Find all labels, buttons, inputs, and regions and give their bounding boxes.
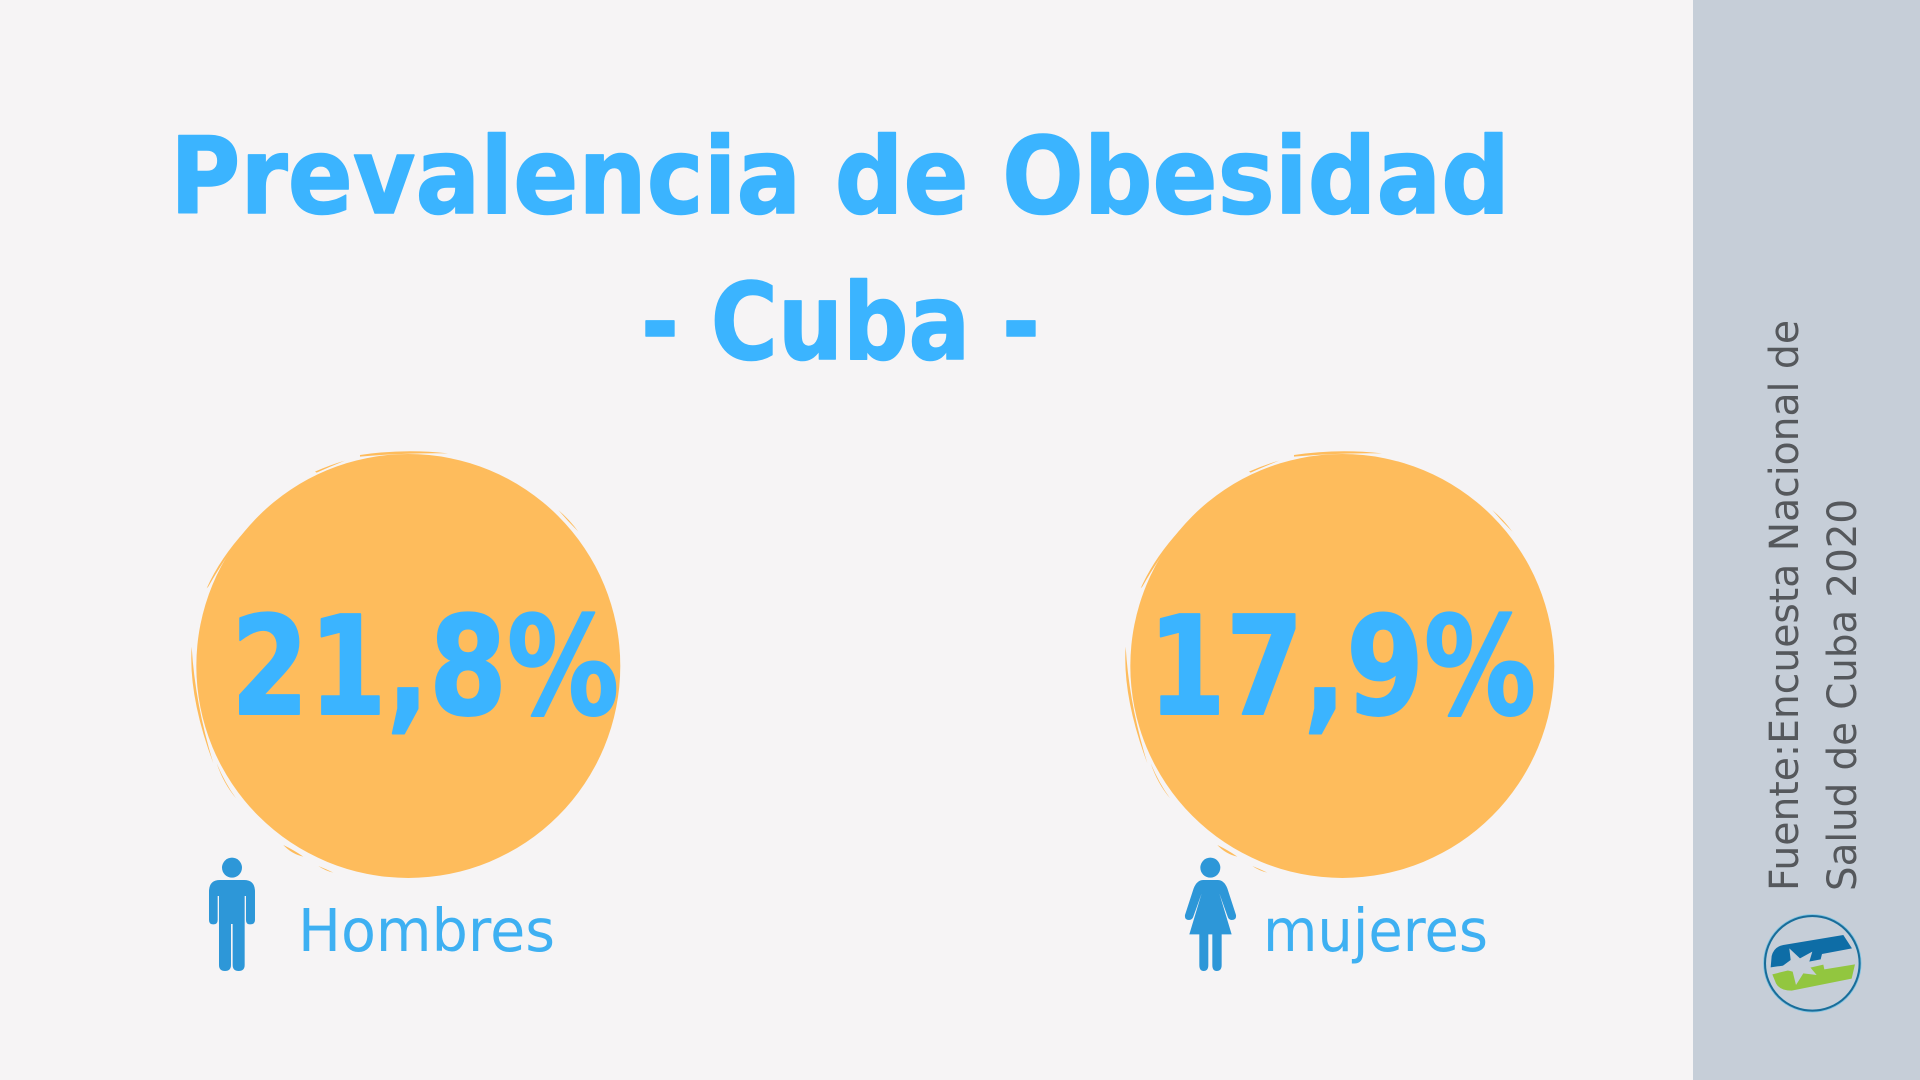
value: mujeres: 17,9% <box>1148 588 1536 747</box>
sidebar panel <box>1693 0 1920 1080</box>
title <box>170 115 1510 384</box>
source text <box>1762 320 1866 891</box>
value: hombres: 21,8% <box>231 588 619 747</box>
title: Prevalencia de Obesidad <box>170 115 1510 238</box>
icon: woman <box>1185 858 1236 971</box>
circle: mujeres <box>1125 451 1554 878</box>
circle: hombres <box>191 451 620 878</box>
icon: man <box>209 858 255 971</box>
label: hombres: Hombres <box>298 896 555 965</box>
source text: Fuente:Encuesta Nacional de <box>1762 320 1808 891</box>
icon: logo <box>1765 916 1860 1011</box>
label: mujeres: mujeres <box>1263 896 1488 965</box>
source text: Salud de Cuba 2020 <box>1820 499 1866 891</box>
title: - Cuba - <box>641 261 1040 384</box>
